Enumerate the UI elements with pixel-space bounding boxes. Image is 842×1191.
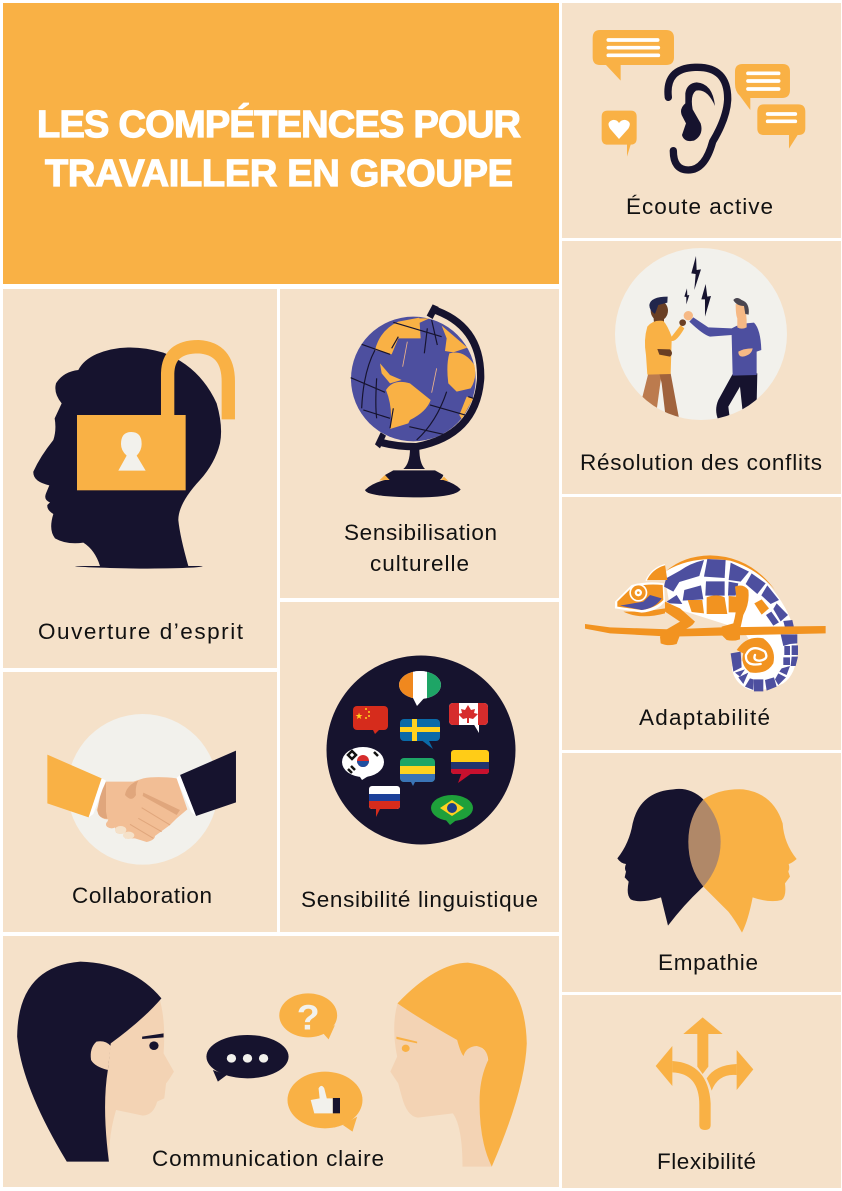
panel: communication claire xyxy=(3,936,559,1187)
speech bubble: thumbs up xyxy=(287,1072,362,1132)
panel: title xyxy=(3,3,559,284)
heading: TRAVAILLER EN GROUPE xyxy=(45,153,513,195)
icon: globe xyxy=(351,304,481,497)
heading: LES COMPÉTENCES POUR xyxy=(37,102,521,146)
flag: Colombia xyxy=(451,750,489,783)
label: Communication claire xyxy=(152,1146,384,1171)
flag: Ivory Coast xyxy=(399,670,441,706)
panel: résolution des conflits xyxy=(562,241,841,494)
icon: three-way arrows xyxy=(656,1017,753,1130)
label: Flexibilité xyxy=(657,1149,756,1174)
flag: Russia xyxy=(369,786,400,817)
icon: chameleon xyxy=(585,555,826,691)
icon: handshake xyxy=(47,714,236,865)
right face xyxy=(390,963,527,1167)
flag: Sweden xyxy=(400,719,440,749)
flag: China xyxy=(353,706,388,734)
panel: adaptabilité xyxy=(562,497,841,750)
left face xyxy=(17,962,174,1162)
speech bubble: ellipsis xyxy=(206,1035,289,1082)
icon: circle of flag speech bubbles xyxy=(326,656,516,844)
panel: empathie xyxy=(562,753,841,992)
illustration: two faces talking xyxy=(17,962,527,1167)
label: Empathie xyxy=(658,950,758,975)
panel: sensibilisation culturelle xyxy=(280,289,559,598)
label: Sensibilité linguistique xyxy=(301,887,538,912)
label: Résolution des conflits xyxy=(580,450,822,475)
icon: ear and speech bubbles xyxy=(593,30,805,170)
heading xyxy=(37,102,521,195)
label: Écoute active xyxy=(626,194,773,219)
panel: écoute active xyxy=(562,3,841,238)
flag: South Korea xyxy=(342,747,384,780)
speech bubble: question mark xyxy=(279,993,337,1039)
speech bubble: question mark: ? xyxy=(297,997,320,1037)
panel: sensibilité linguistique xyxy=(280,602,559,932)
flag: Canada xyxy=(449,703,488,733)
icon: head with open padlock xyxy=(33,347,228,569)
icon: two overlapping heads xyxy=(617,789,797,933)
panel: ouverture d'esprit xyxy=(3,289,277,668)
flag: China: ★ xyxy=(355,712,363,722)
label: Adaptabilité xyxy=(639,705,770,730)
label: Sensibilisation xyxy=(344,520,497,545)
label: culturelle xyxy=(370,551,469,576)
icon: two people arguing xyxy=(615,248,787,420)
label: Collaboration xyxy=(72,883,212,908)
label: Ouverture d’esprit xyxy=(38,619,244,644)
flag: Brazil xyxy=(431,795,473,825)
label xyxy=(344,520,497,576)
flag: Gabon xyxy=(400,758,435,786)
panel: flexibilité xyxy=(562,995,841,1188)
panel: collaboration xyxy=(3,672,277,932)
